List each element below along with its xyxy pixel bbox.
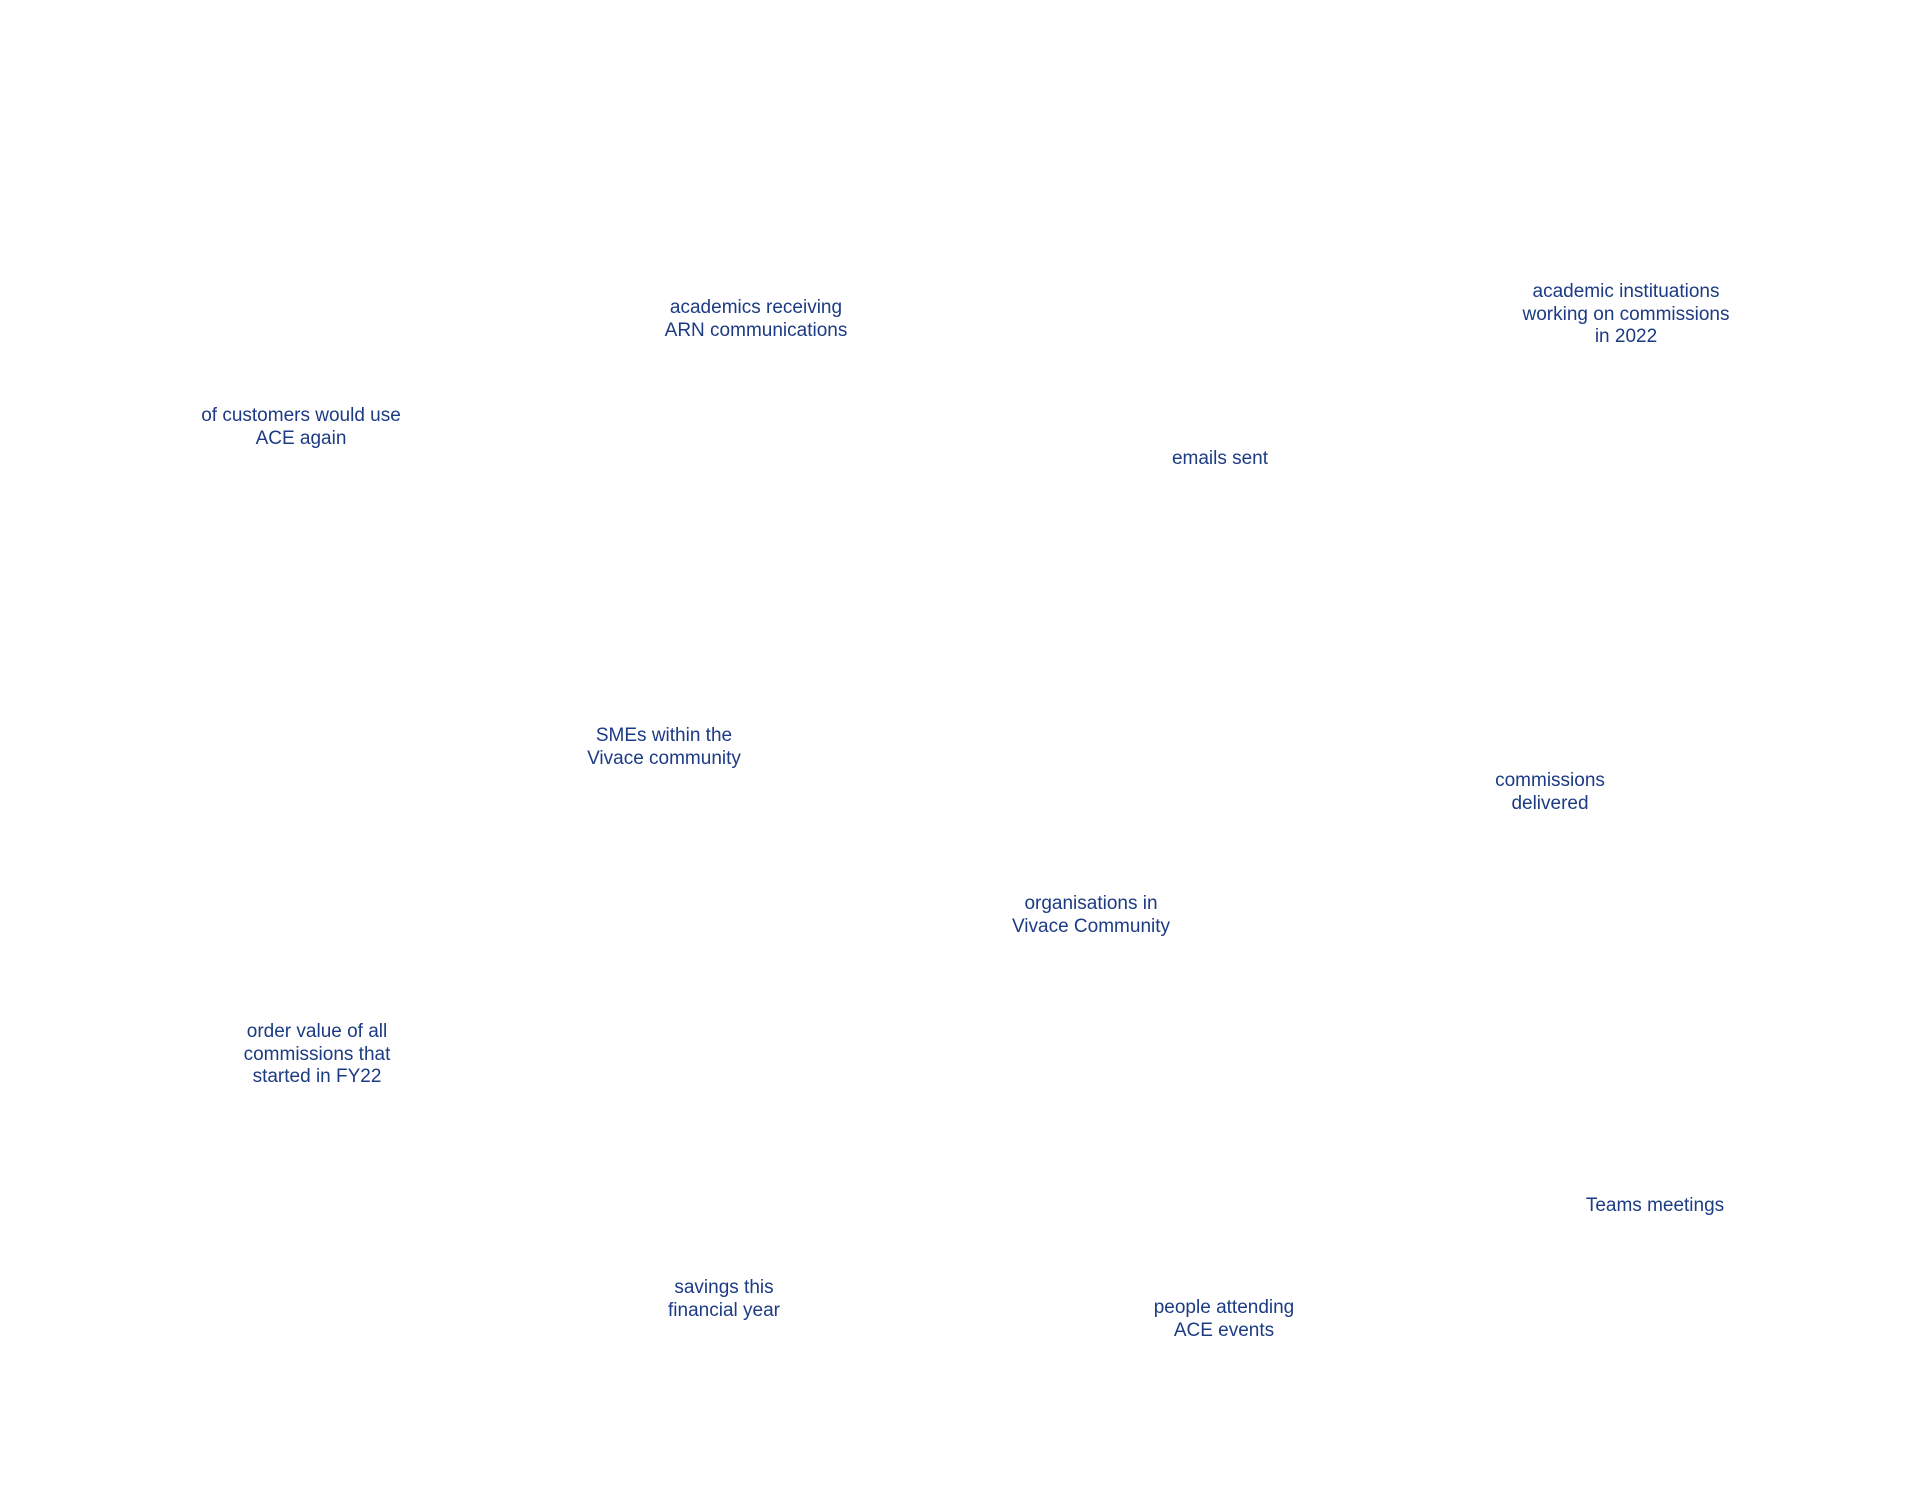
label: of customers would use ACE again bbox=[201, 405, 401, 448]
label: people attending ACE events: people attending bbox=[1154, 1297, 1294, 1318]
label: academic institutions working on commissions in 2022: academic instituations bbox=[1533, 281, 1719, 302]
label: organisations in Vivace Community: organisations in bbox=[1024, 893, 1158, 914]
label: emails sent: emails sent bbox=[1172, 448, 1268, 469]
label: academic institutions working on commissions in 2022: working on commissions bbox=[1523, 304, 1729, 324]
label: people attending ACE events: ACE events bbox=[1174, 1320, 1274, 1340]
label: order value of all commissions that started in FY22: order value of all bbox=[247, 1021, 387, 1042]
label: commissions delivered bbox=[1495, 770, 1605, 814]
label: savings this financial year: savings this bbox=[674, 1277, 774, 1298]
label: SMEs within the Vivace community: Vivace community bbox=[587, 748, 741, 768]
label: order value of all commissions that started in FY22 bbox=[244, 1021, 390, 1087]
label: of customers would use ACE again: of customers would use bbox=[201, 405, 401, 426]
label: order value of all commissions that started in FY22: commissions that bbox=[244, 1044, 390, 1064]
label: organisations in Vivace Community bbox=[1012, 893, 1170, 936]
label: commissions delivered: delivered bbox=[1511, 792, 1589, 814]
label: SMEs within the Vivace community bbox=[587, 725, 741, 768]
label: savings this financial year: financial year bbox=[668, 1300, 780, 1320]
label: Teams meetings: Teams meetings bbox=[1586, 1195, 1724, 1216]
label: academics receiving ARN communications: academics receiving bbox=[670, 297, 842, 318]
label: people attending ACE events bbox=[1154, 1297, 1294, 1340]
label: commissions delivered: commissions bbox=[1495, 770, 1605, 791]
label: academics receiving ARN communications bbox=[664, 297, 847, 340]
label: academic institutions working on commissions in 2022 bbox=[1522, 281, 1729, 347]
label: organisations in Vivace Community: Vivace Community bbox=[1012, 916, 1170, 936]
label: of customers would use ACE again: ACE again bbox=[256, 428, 346, 448]
label: order value of all commissions that started in FY22: started in FY22 bbox=[253, 1066, 381, 1087]
label: savings this financial year bbox=[668, 1277, 780, 1320]
label: academics receiving ARN communications: ARN communications bbox=[665, 320, 847, 340]
label: SMEs within the Vivace community: SMEs within the bbox=[596, 725, 732, 746]
label: academic institutions working on commissions in 2022: in 2022 bbox=[1595, 326, 1657, 347]
